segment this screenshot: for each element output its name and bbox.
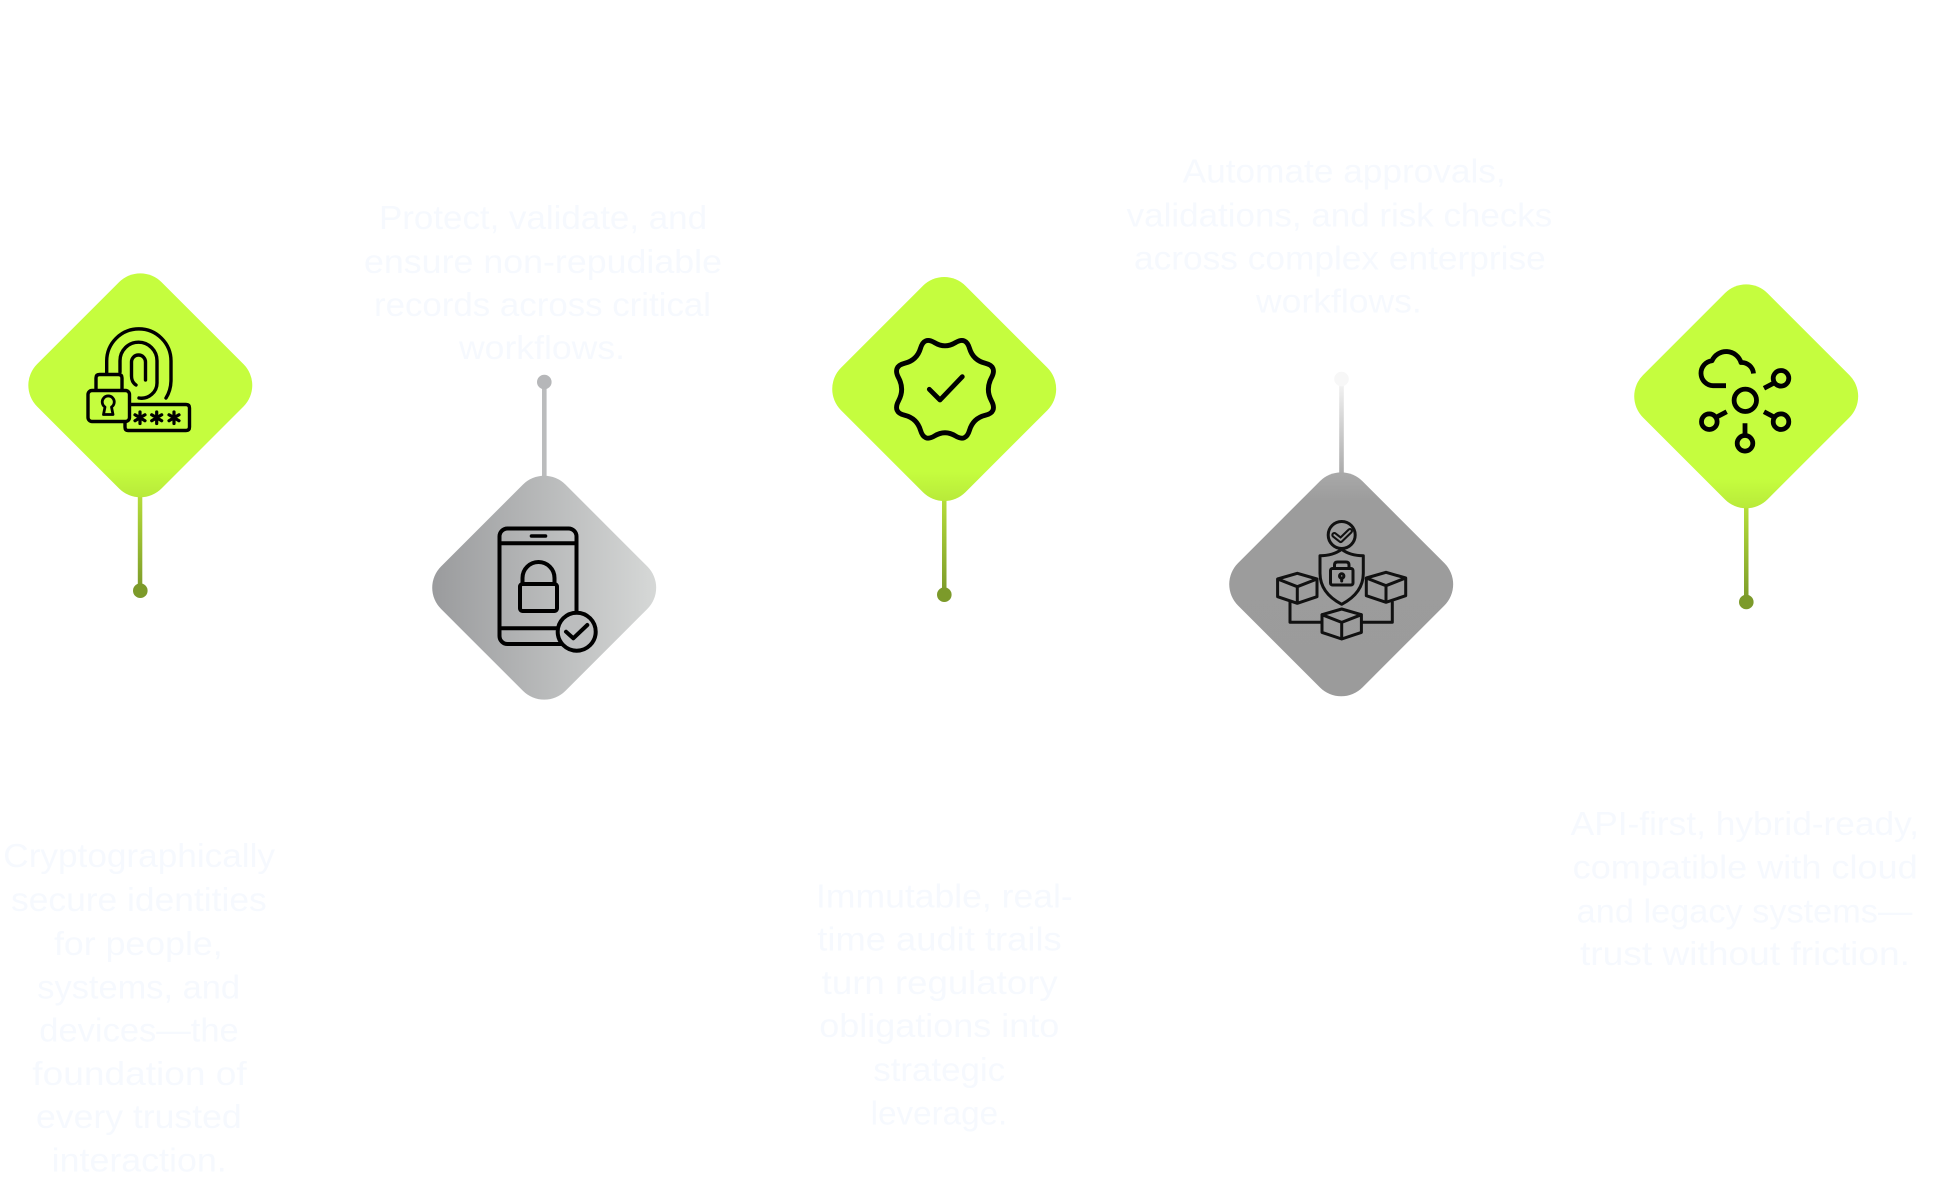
text: pillar 2 description: ensure non-repudiable — [364, 243, 722, 280]
text: pillar 5 description: API-first, hybrid-ready, — [1571, 805, 1919, 842]
connector stem and dot 1 — [133, 495, 148, 598]
text: pillar 5 description: trust without friction. — [1580, 935, 1910, 972]
text: pillar 3 description: leverage. — [871, 1094, 1007, 1131]
text: pillar 2 description: Protect, validate, and — [379, 199, 707, 236]
text: pillar 4 description: across complex enterprise — [1134, 240, 1546, 277]
text: pillar 3 description: turn regulatory — [822, 964, 1058, 1001]
diamond 5 — [1634, 284, 1858, 508]
pillar 1: identity — [3, 273, 276, 1178]
pillar 4: workflow automation — [1127, 152, 1552, 696]
pillar 3: audit trails — [816, 277, 1073, 1131]
pillar 2: digital signatures — [364, 199, 722, 700]
text: pillar 2 description — [364, 199, 722, 366]
text: pillar 4 description: workflows. — [1255, 282, 1422, 319]
icon: cloud network — [1701, 352, 1789, 451]
text: pillar 1 description: systems, and — [37, 968, 240, 1006]
text: pillar 1 description: for people, — [54, 925, 223, 962]
text: pillar 1 description: Cryptographically — [3, 837, 276, 874]
connector stem and dot 4 — [1334, 372, 1349, 474]
text: pillar 1 description: secure identities — [11, 881, 267, 918]
text: pillar 1 description: foundation of — [32, 1055, 248, 1092]
text: pillar 2 description: workflows. — [458, 329, 625, 366]
text: pillar 3 description: time audit trails — [817, 921, 1062, 958]
text: pillar 4 description: Automate approvals, — [1183, 152, 1506, 189]
text: pillar 3 description: Immutable, real- — [816, 877, 1073, 914]
icon: secured block network — [1278, 522, 1406, 639]
connector stem and dot 2 — [537, 375, 552, 477]
connector stem and dot 5 — [1739, 506, 1754, 609]
text: pillar 2 description: records across critical — [374, 286, 711, 323]
diamond 2 — [432, 476, 656, 700]
diamond 3 — [832, 277, 1056, 501]
text: pillar 1 description: interaction. — [52, 1142, 227, 1178]
text: pillar 4 description: validations, and risk checks — [1127, 196, 1552, 233]
text: pillar 4 description — [1127, 152, 1552, 319]
pillar 5: integration — [1571, 284, 1919, 972]
icon: verified badge — [897, 340, 993, 438]
text: pillar 5 description — [1571, 805, 1919, 972]
icon: phone with lock and check — [500, 528, 596, 651]
diamond 4 — [1229, 472, 1453, 696]
text: pillar 3 description: strategic — [873, 1051, 1005, 1088]
text: pillar 3 description: obligations into — [819, 1007, 1059, 1044]
text: pillar 1 description: devices—the — [39, 1012, 239, 1048]
text: pillar 1 description — [3, 837, 276, 1178]
connector stem and dot 3 — [937, 499, 952, 602]
icon: fingerprint, padlock and password — [88, 329, 190, 430]
text: pillar 5 description: and legacy systems— — [1577, 892, 1912, 929]
text: pillar 1 description: every trusted — [36, 1098, 242, 1135]
text: pillar 3 description — [816, 877, 1073, 1131]
text: pillar 5 description: compatible with cloud — [1573, 848, 1918, 885]
diamond 1 — [28, 273, 252, 497]
